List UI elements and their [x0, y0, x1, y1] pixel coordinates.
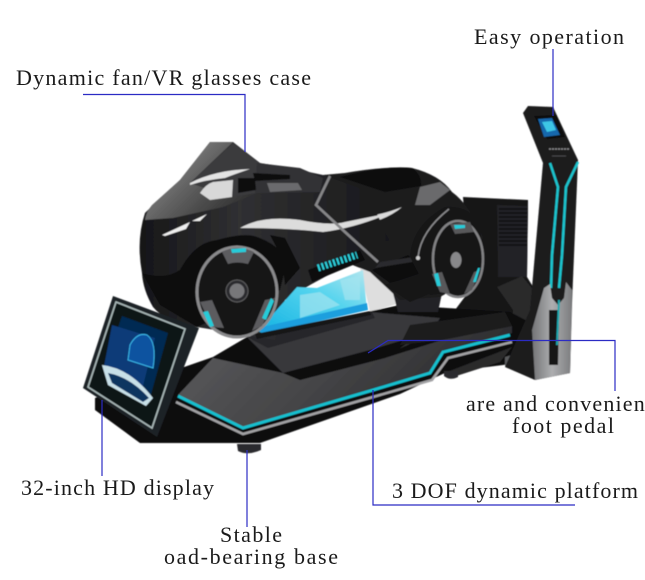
label: foot pedal: foot pedal [512, 413, 614, 438]
light strip [178, 335, 510, 428]
machine: front body [140, 142, 390, 340]
machine [83, 106, 578, 453]
machine: fan panel with cyan light [308, 250, 365, 282]
label: dynamic fan / VR glasses case: Dynamic fan/VR glasses case [16, 65, 311, 90]
machine: rear box [440, 197, 537, 345]
machine: blue ice panel [255, 270, 371, 339]
machine: 32-inch display [83, 296, 199, 437]
pedestal feet [237, 444, 261, 453]
label: foot pedal [466, 391, 645, 438]
label: stable load-bearing base: Stable [220, 522, 282, 547]
machine: front wheel [197, 247, 277, 337]
label: stable load-bearing base [164, 522, 338, 569]
label: stable load-bearing base: oad-bearing base [164, 544, 338, 569]
machine: rear wheel [410, 207, 483, 297]
machine: seat and rear body [300, 167, 483, 302]
machine: platform [95, 293, 540, 453]
machine: background behind ice [360, 268, 410, 312]
label: 3 DOF dynamic platform: 3 DOF dynamic platform [392, 478, 638, 503]
label: easy operation: Easy operation [474, 24, 624, 49]
machine: display stand [505, 106, 578, 380]
callout lines [83, 49, 615, 527]
label: 32-inch HD display: 32-inch HD display [21, 475, 214, 500]
